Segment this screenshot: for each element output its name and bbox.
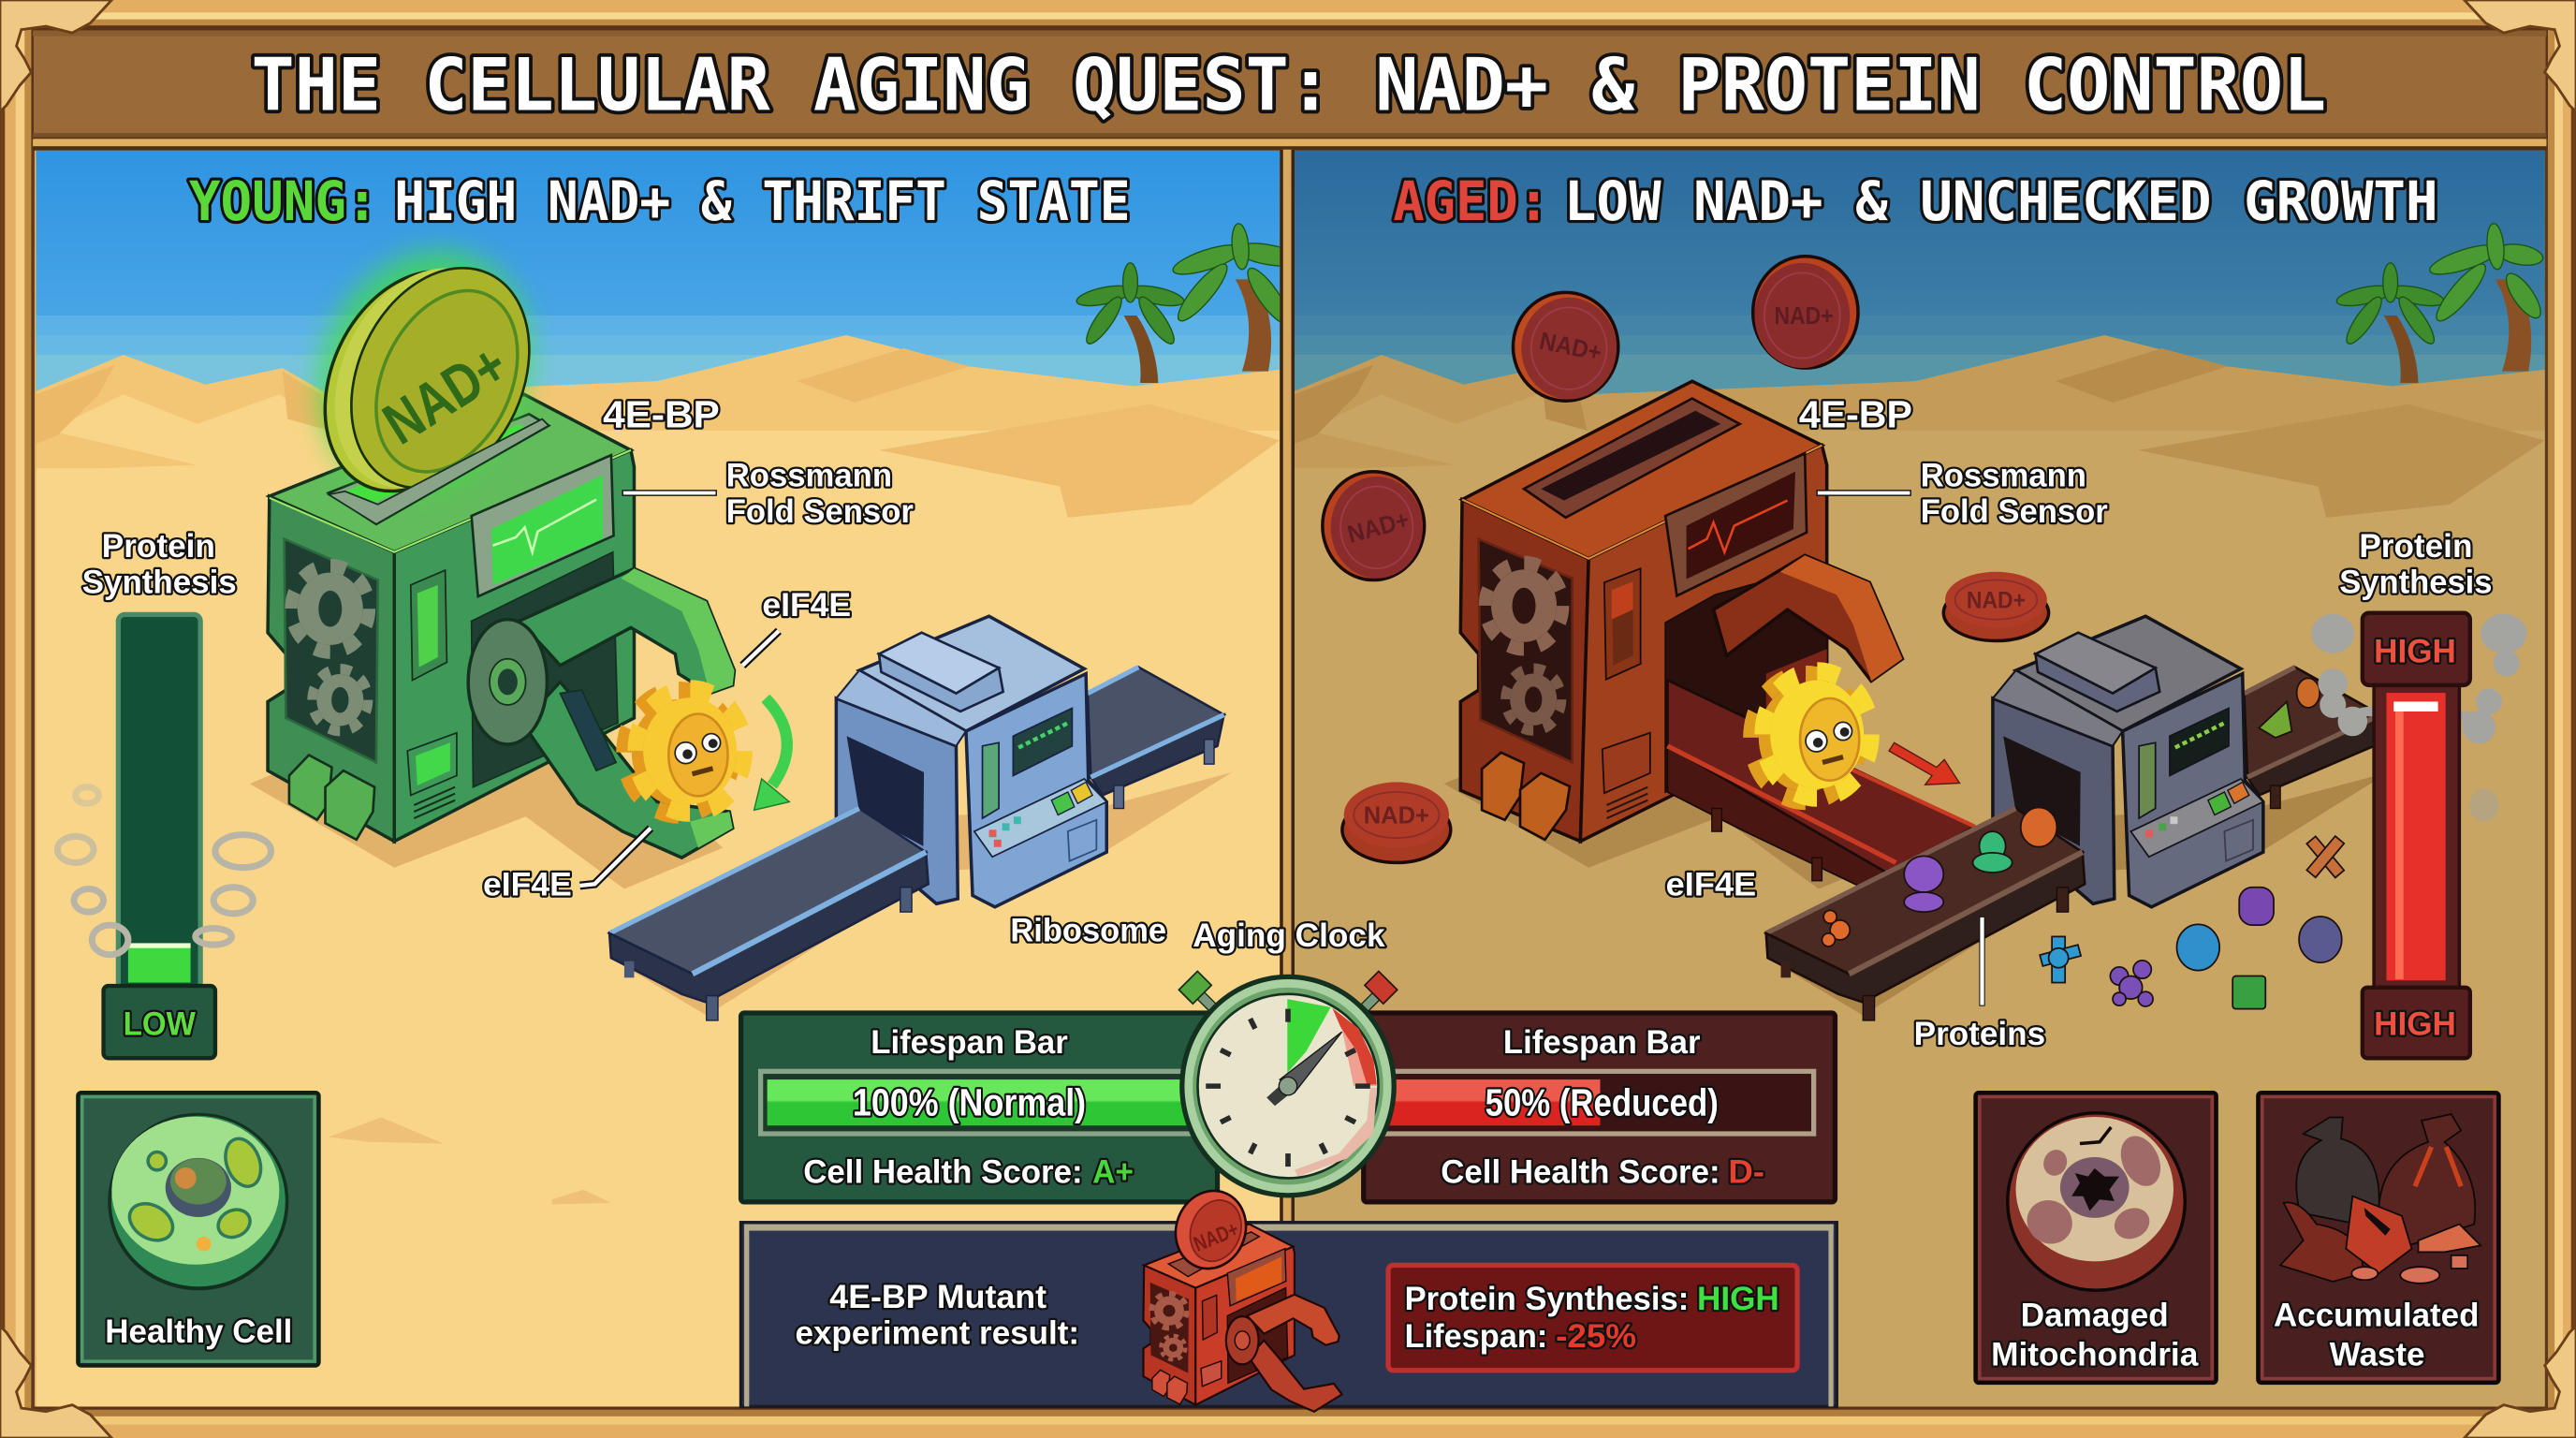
label: proteins xyxy=(1914,917,2045,1052)
curved arrow xyxy=(754,698,789,810)
gear: small xyxy=(1505,668,1561,730)
coin 2 xyxy=(1753,257,1858,368)
label: Rossmann sensor xyxy=(1817,458,2108,530)
heading: aged: LOW NAD+ & UNCHECKED GROWTH xyxy=(1564,169,2438,233)
coin 5: NAD+ xyxy=(1364,800,1429,829)
panel: damaged mitochondria xyxy=(1976,1093,2217,1383)
accumulated waste label xyxy=(2274,1297,2479,1372)
panel: aged xyxy=(1295,151,2547,1406)
gauge label: Protein xyxy=(2359,528,2472,565)
gauge: protein synthesis high: HIGH xyxy=(2374,633,2456,669)
labels: aged xyxy=(1666,392,2108,1052)
panel: lifespan aged: Lifespan Bar xyxy=(1503,1024,1701,1061)
label: Rossmann sensor: Rossmann xyxy=(726,458,892,494)
machine: red 4E-BP xyxy=(1444,381,1917,889)
labels: young xyxy=(483,392,1166,949)
icon: mini coin xyxy=(1164,1181,1257,1279)
floating NAD+ coins xyxy=(1323,257,2049,862)
health score young: Cell Health Score: xyxy=(803,1154,1083,1191)
aging clock: Aging Clock xyxy=(1193,917,1385,954)
sky and desert: aged xyxy=(1295,151,2545,1406)
panel: lifespan young: Lifespan Bar xyxy=(871,1024,1068,1061)
palm trees: young xyxy=(1075,223,1302,383)
accumulated waste label: Accumulated xyxy=(2274,1297,2479,1333)
proteins xyxy=(1822,678,2344,1009)
panel: lifespan young xyxy=(741,1013,1218,1202)
coin 2: NAD+ xyxy=(1775,301,1834,330)
coin 1 xyxy=(1513,292,1618,401)
sky and desert: young xyxy=(37,151,1280,1406)
labels: young: 4E-BP xyxy=(603,392,720,435)
yellow eIF4E gear: young xyxy=(623,689,745,814)
gear: small xyxy=(312,669,368,731)
damaged mitochondria label: Damaged xyxy=(2021,1297,2169,1333)
divider xyxy=(1280,150,1295,1406)
result box: -25% xyxy=(1556,1318,1636,1355)
gauge label xyxy=(2339,528,2492,601)
label: Rossmann sensor: Rossmann xyxy=(1921,458,2086,494)
coin 1: NAD+ xyxy=(1537,327,1604,367)
lifespan bar young: 100% (Normal) xyxy=(853,1081,1086,1124)
coin 4: NAD+ xyxy=(1967,588,2026,613)
clock knob green xyxy=(1178,971,1216,1011)
result box: Lifespan: xyxy=(1405,1318,1547,1355)
lifespan bar young xyxy=(761,1071,1204,1134)
mutant label: 4E-BP Mutant xyxy=(829,1279,1046,1315)
icon: damaged mitochondrion xyxy=(2008,1113,2185,1290)
coin slot xyxy=(329,414,549,524)
damaged mitochondria label xyxy=(1991,1297,2199,1372)
lifespan bar aged xyxy=(1372,1071,1814,1134)
gear: large xyxy=(1485,563,1563,649)
health score aged: D- xyxy=(1728,1154,1764,1191)
label: eIF4E top: eIF4E xyxy=(762,587,851,624)
labels: aged: eIF4E xyxy=(1666,867,1756,903)
result box: HIGH xyxy=(1697,1281,1779,1317)
gauge: protein synthesis low xyxy=(82,528,237,1058)
clamp arm: lifted xyxy=(1714,555,1902,681)
panel: young xyxy=(37,151,1302,1406)
result box: Protein Synthesis: xyxy=(1405,1281,1689,1317)
title banner xyxy=(33,26,2546,151)
labels: young: Ribosome xyxy=(1010,913,1166,949)
gauge label: Protein xyxy=(102,528,215,565)
gauge label: Synthesis xyxy=(2339,565,2492,601)
health score young: A+ xyxy=(1092,1154,1134,1191)
red arrow xyxy=(1889,742,1959,785)
machine: ribosome grey xyxy=(1766,616,2389,1020)
smoke rings xyxy=(57,787,271,955)
panel: healthy cell: Healthy Cell xyxy=(105,1313,292,1350)
panel: lifespan aged xyxy=(1364,1013,1835,1202)
coin 4 xyxy=(1943,572,2049,640)
label: eIF4E bottom xyxy=(483,829,651,903)
icon: mini red machine xyxy=(1143,1224,1342,1412)
label: proteins: Proteins xyxy=(1914,1016,2045,1052)
gauge: protein synthesis low: LOW xyxy=(124,1006,197,1043)
label: eIF4E top xyxy=(742,587,851,666)
machine: ribosome blue conveyors xyxy=(609,616,1232,1020)
gauge: protein synthesis high: HIGH xyxy=(2374,1006,2456,1043)
palm trees: aged xyxy=(2335,223,2547,383)
panel: healthy cell xyxy=(78,1093,318,1365)
accumulated waste label: Waste xyxy=(2330,1336,2425,1372)
label: Rossmann sensor: Fold Sensor xyxy=(1921,493,2108,530)
label: Rossmann sensor xyxy=(622,458,914,530)
coin 3: NAD+ xyxy=(1344,506,1412,549)
health score aged: Cell Health Score: xyxy=(1441,1154,1720,1191)
heading: young: YOUNG: xyxy=(189,169,378,233)
damaged mitochondria label: Mitochondria xyxy=(1991,1336,2199,1372)
heading: young: HIGH NAD+ & THRIFT STATE xyxy=(394,169,1131,233)
label: eIF4E bottom: eIF4E xyxy=(483,867,572,903)
coin 5 xyxy=(1342,782,1451,862)
labels: aged: 4E-BP xyxy=(1799,392,1912,435)
lifespan bar aged: 50% (Reduced) xyxy=(1486,1081,1719,1124)
mutant label xyxy=(795,1279,1079,1352)
gauge: protein synthesis high xyxy=(2311,528,2526,1058)
title text: THE CELLULAR AGING QUEST: NAD+ & PROTEIN CONTROL xyxy=(252,44,2326,128)
result box xyxy=(1388,1265,1797,1371)
machine: green 4E-BP xyxy=(250,394,723,889)
gauge label: Synthesis xyxy=(82,565,237,601)
aging clock xyxy=(1178,917,1398,1197)
label: Rossmann sensor: Fold Sensor xyxy=(726,493,914,530)
heading: aged: AGED: xyxy=(1393,169,1549,233)
icon: waste bags xyxy=(2280,1114,2481,1284)
mutant label: experiment result: xyxy=(795,1315,1079,1352)
coin slot xyxy=(1524,399,1740,518)
icon: healthy cell xyxy=(108,1113,288,1290)
clamp arm xyxy=(468,568,735,858)
smoke clouds xyxy=(2311,614,2526,822)
panel: mutant experiment xyxy=(741,1181,1837,1412)
gauge label xyxy=(82,528,237,601)
clock hand xyxy=(1266,1032,1342,1106)
icon: mini coin: NAD+ xyxy=(1190,1216,1242,1256)
clock knob red xyxy=(1361,971,1398,1011)
icon: NAD+ coin: NAD+ xyxy=(373,332,519,457)
conveyor: red lane xyxy=(1667,681,1975,901)
coin 3 xyxy=(1323,472,1425,580)
icon: NAD+ coin xyxy=(279,215,569,528)
panel: accumulated waste xyxy=(2258,1093,2499,1383)
gear: large xyxy=(291,565,369,652)
yellow eIF4E gear: aged xyxy=(1750,671,1872,801)
